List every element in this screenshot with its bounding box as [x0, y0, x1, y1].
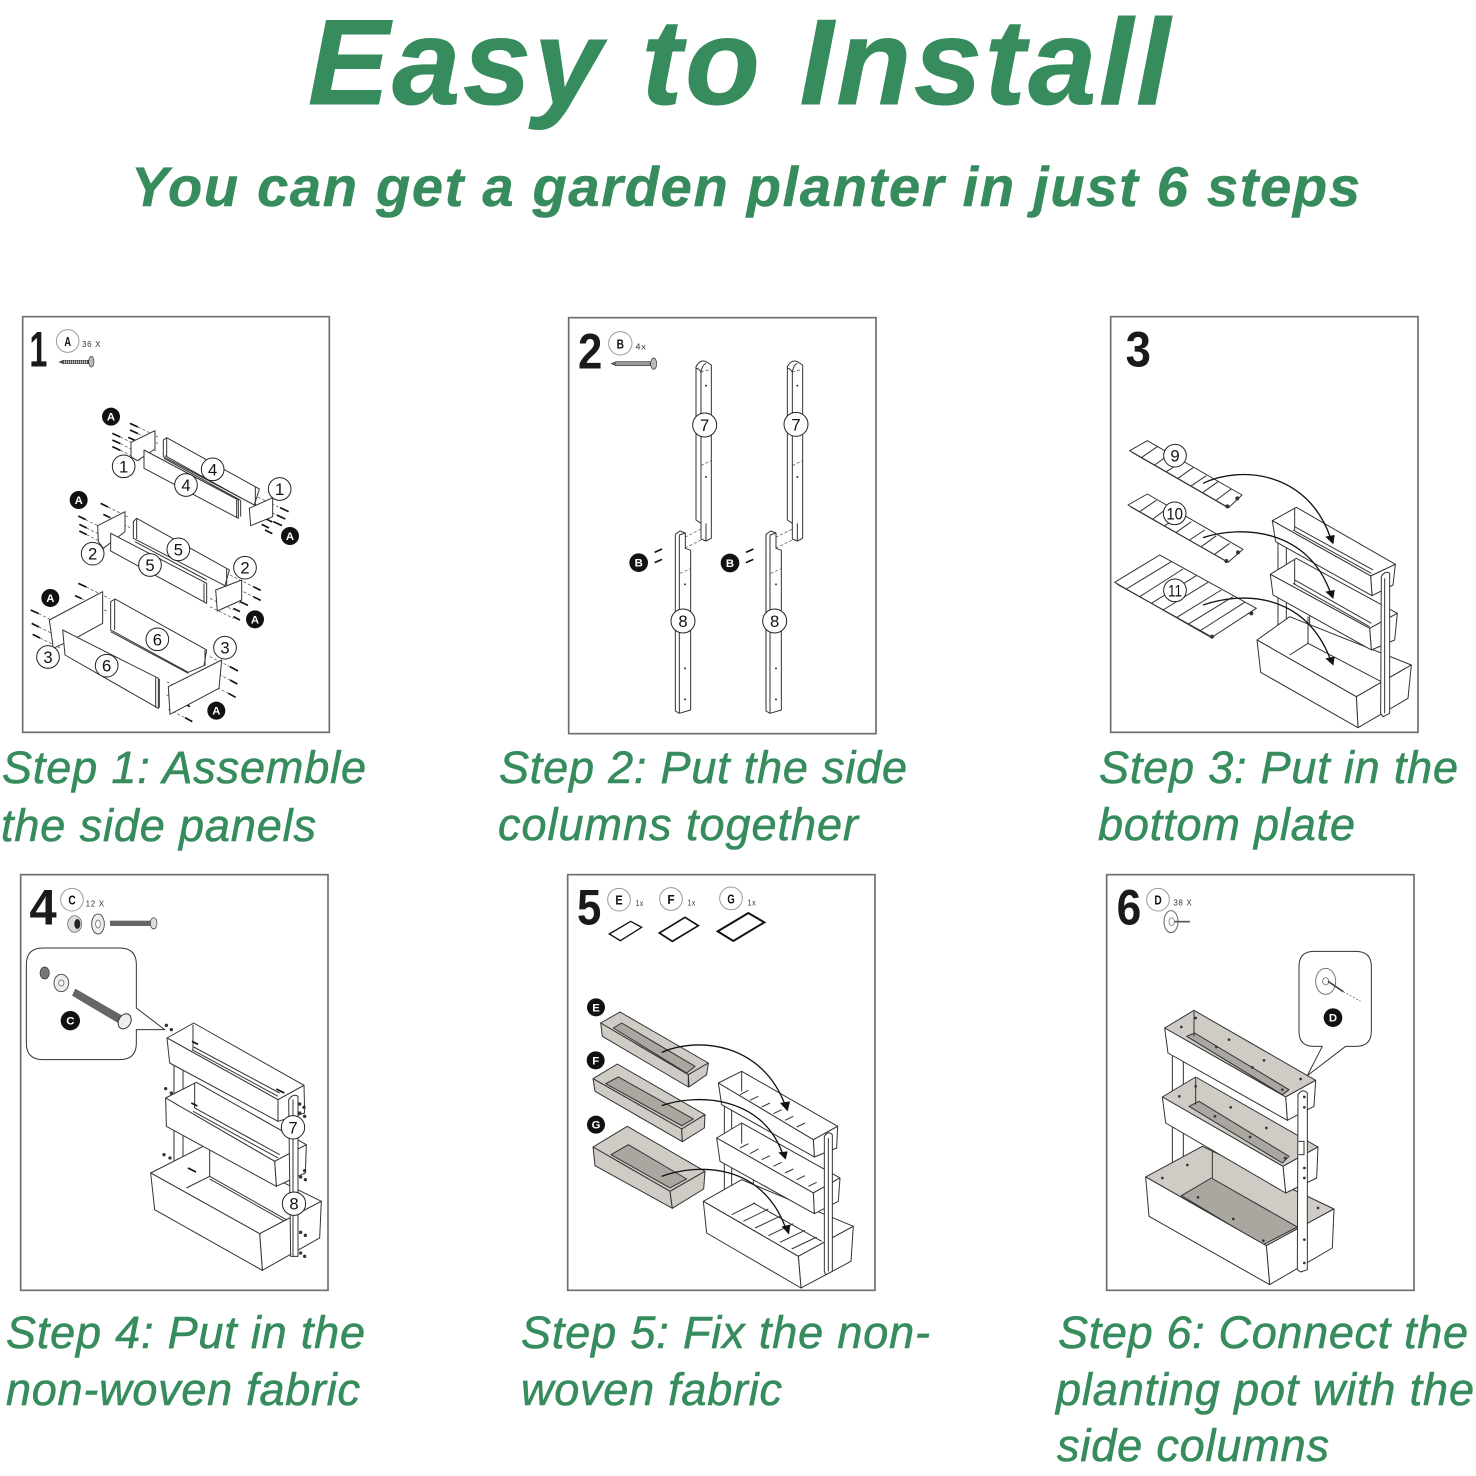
caption: step 3: Step 3: Put in the [1099, 742, 1458, 793]
top box [167, 1023, 305, 1121]
part callout numbers: 5 [174, 540, 183, 559]
part B: screw, 4x [609, 332, 657, 369]
number and letter badges: 8 [770, 612, 779, 631]
arrows into planter [662, 1045, 790, 1235]
top box exploded [112, 423, 289, 534]
part D: washer nail, 38x: 38 X [1173, 899, 1192, 908]
caption: step 4 [6, 1307, 365, 1415]
parts E, F, G: fabric sheets: E [615, 893, 623, 908]
middle box exploded [78, 503, 261, 620]
fabric liner E [587, 998, 708, 1087]
callout: bolt detail: C [66, 1016, 74, 1028]
numbers 7 and 8: 7 [288, 1118, 298, 1137]
number and letter badges: 7 [700, 416, 709, 435]
black A badges: A [75, 495, 83, 507]
number and letter badges [629, 412, 808, 633]
slatted plate 9: 9 [1170, 447, 1180, 466]
front post with bolts [162, 1024, 307, 1258]
panel: step 6 diagram [1107, 875, 1414, 1290]
caption: step 1: Step 1: Assemble [2, 742, 366, 793]
panel: step 3 diagram [1111, 317, 1418, 732]
screws in boxes [1161, 1017, 1319, 1242]
callout: washer detail: D [1329, 1013, 1337, 1025]
caption: step 6: planting pot with the [1054, 1364, 1474, 1415]
step number 1: 1 [29, 322, 47, 378]
part A: screw, 36x: A [64, 334, 71, 349]
back posts [174, 1063, 208, 1206]
arrows into planter [1203, 475, 1335, 666]
number and letter badges: 8 [678, 612, 688, 631]
step number 2: 2 [578, 323, 602, 379]
slatted plate 10: 10 [1166, 504, 1183, 523]
part callout numbers: 6 [102, 657, 111, 676]
caption: step 4: non-woven fabric [6, 1364, 360, 1415]
parts E, F, G: fabric sheets: G [727, 891, 735, 906]
part B: screw, 4x: B [617, 336, 624, 351]
caption: step 6 [1054, 1307, 1474, 1471]
part callout numbers: 2 [88, 545, 97, 564]
columns 7 and 8, right [746, 361, 803, 713]
assembled planter frame [1257, 507, 1411, 728]
front post [1297, 1091, 1307, 1272]
numbers 7 and 8 [281, 1116, 306, 1215]
part A: screw, 36x [56, 330, 101, 367]
slatted plate 10 [1128, 494, 1243, 563]
step number 3: 3 [1126, 322, 1151, 378]
top box [1165, 1010, 1316, 1120]
step number 6: 6 [1117, 880, 1141, 936]
caption: step 5 [521, 1307, 930, 1415]
step number 4: 4 [29, 880, 57, 936]
number and letter badges: 7 [791, 415, 801, 434]
black A badges: A [107, 412, 115, 424]
step number 5: 5 [577, 880, 601, 936]
slatted plate 9 [1130, 441, 1242, 508]
caption: step 2 [498, 742, 907, 850]
number and letter badges: B [726, 558, 734, 570]
parts E, F, G: fabric sheets: 1x [636, 899, 644, 908]
parts E, F, G: fabric sheets: 1x [748, 898, 756, 907]
callout: bolt detail [26, 948, 165, 1060]
assembled planter with slats [703, 1071, 853, 1288]
caption: step 5: woven fabric [521, 1364, 782, 1415]
fabric liner F [587, 1051, 705, 1142]
back posts [1172, 1055, 1183, 1166]
middle box [1162, 1077, 1318, 1193]
part callout numbers: 6 [153, 630, 162, 649]
panel: step 5 diagram [568, 875, 875, 1290]
columns 7 and 8, left [655, 361, 712, 713]
caption: step 3: bottom plate [1098, 799, 1355, 850]
callout: washer detail [1299, 951, 1371, 1076]
parts E, F, G: fabric sheets [608, 887, 764, 941]
black A badges: A [286, 531, 294, 543]
fabric liner G [587, 1116, 705, 1208]
caption: step 2: columns together [498, 799, 860, 850]
black A badges [41, 408, 299, 720]
part callout numbers: 1 [119, 457, 128, 476]
number and letter badges: B [635, 558, 643, 570]
middle box [166, 1082, 306, 1186]
slatted plate 11: 11 [1168, 581, 1182, 600]
fabric liner G: G [592, 1120, 601, 1132]
parts E, F, G: fabric sheets: F [667, 892, 675, 907]
panel: step 4 diagram [21, 875, 328, 1290]
caption: step 5: Step 5: Fix the non- [521, 1307, 930, 1358]
bottom box [1146, 1146, 1334, 1285]
part callout numbers: 2 [240, 559, 250, 578]
part callout numbers: 3 [43, 648, 53, 667]
slatted plate 11 [1115, 555, 1256, 639]
part callout numbers: 1 [275, 480, 284, 499]
black A badges: A [251, 614, 259, 626]
part callout numbers: 4 [208, 460, 217, 479]
part D: washer nail, 38x [1147, 888, 1192, 933]
numbers 7 and 8: 8 [289, 1195, 299, 1214]
part callout numbers: 5 [145, 556, 155, 575]
part callout numbers: 3 [220, 639, 230, 658]
part C: bolt set, 12x: 12 X [86, 899, 105, 908]
caption: step 2: Step 2: Put the side [499, 742, 907, 793]
part B: screw, 4x: 4x [635, 343, 647, 352]
part C: bolt set, 12x [61, 888, 157, 934]
part callout numbers: 4 [181, 476, 191, 495]
part A: screw, 36x: 36 X [82, 340, 101, 349]
bottom box [151, 1145, 321, 1270]
caption: step 6: Step 6: Connect the [1058, 1307, 1468, 1358]
black A badges: A [46, 593, 54, 605]
caption: step 1 [1, 742, 366, 851]
bottom box exploded [31, 583, 238, 722]
subtitle: You can get a garden planter in just 6 steps [131, 155, 1360, 218]
panel: step 1 diagram [23, 317, 329, 732]
panel: step 2 diagram [569, 318, 876, 734]
part D: washer nail, 38x: D [1154, 893, 1162, 908]
part C: bolt set, 12x: C [68, 893, 76, 908]
black A badges: A [212, 706, 220, 718]
part callout numbers [37, 455, 291, 677]
caption: step 4: Step 4: Put in the [6, 1307, 365, 1358]
caption: step 1: the side panels [1, 800, 316, 851]
parts E, F, G: fabric sheets: 1x [688, 898, 696, 907]
fabric liner F: F [592, 1055, 599, 1067]
fabric liner E: E [592, 1002, 600, 1014]
caption: step 3 [1098, 742, 1458, 850]
caption: step 6: side columns [1057, 1420, 1329, 1471]
